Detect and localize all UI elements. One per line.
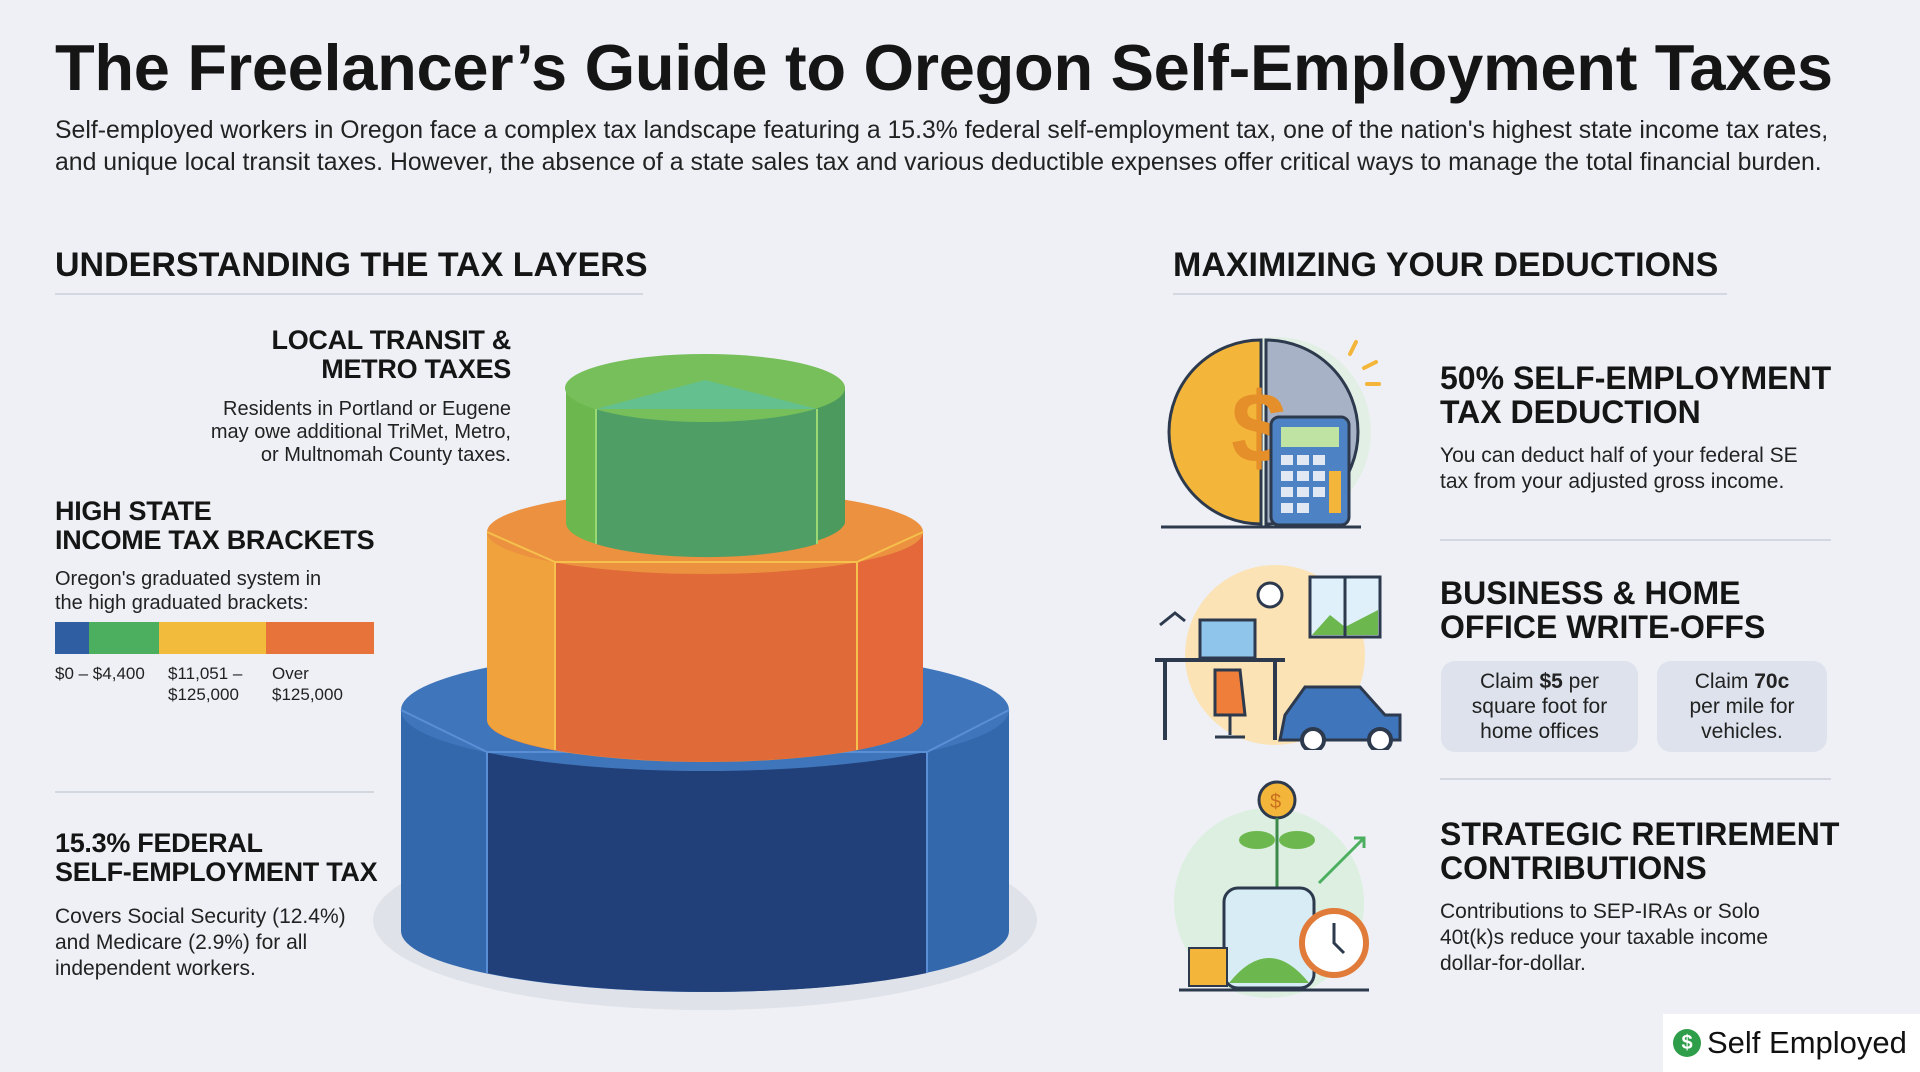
text: business & home office — [1440, 575, 1765, 645]
bracket color bar — [55, 622, 374, 654]
text: retirement contributions: Contributions to SEP-IRAs or Solo — [1440, 900, 1760, 923]
text: federal SE tax: independent workers. — [55, 957, 256, 980]
text: high state income tax: HIGH STATE — [55, 496, 212, 526]
top tier: local — [565, 354, 845, 557]
logo: Self Employed — [1663, 1014, 1920, 1072]
text: retirement contributions: STRATEGIC RETIREMENT — [1440, 816, 1839, 852]
text: 50% deduction: You can deduct half of your federal SE — [1440, 444, 1798, 467]
title: The Freelancer’s Guide to Oregon Self-Employment Taxes — [55, 31, 1833, 104]
text: federal SE tax: Covers Social Security (12.4%) — [55, 905, 346, 928]
subtitle: and unique local transit taxes. However, the absence of a state sales tax and various deductible expenses offer critical ways to manage the total financial burden. — [55, 149, 1822, 176]
box: mileage rate: per mile for — [1689, 695, 1795, 718]
text: 50% deduction: tax from your adjusted gross income. — [1440, 470, 1784, 493]
text: business & home office: OFFICE WRITE-OFFS — [1440, 609, 1765, 645]
text: local transit: Residents in Portland or Eugene — [223, 398, 511, 420]
text: 50% deduction: TAX DEDUCTION — [1440, 394, 1701, 430]
heading: understanding the tax layers: UNDERSTANDING THE TAX LAYERS — [55, 246, 648, 284]
icon: retirement jar — [1174, 780, 1369, 998]
icon: home office and car — [1155, 565, 1402, 750]
logo: Self Employed: Self Employed — [1707, 1025, 1907, 1060]
shadow — [373, 830, 1037, 1010]
text: federal SE tax: SELF-EMPLOYMENT TAX — [55, 857, 377, 887]
chart: layered tax cake — [373, 354, 1037, 1010]
text: $11,051 – — [168, 664, 242, 683]
box: home office rate: home offices — [1480, 720, 1599, 743]
bracket labels: $0 – $4,400 — [55, 664, 145, 683]
text: retirement contributions — [1440, 816, 1840, 975]
box: mileage rate: Claim 70c — [1695, 670, 1789, 693]
text: federal SE tax — [55, 828, 378, 980]
text: $125,000 — [168, 685, 239, 704]
icon: coin and calculator: $ — [1231, 372, 1287, 484]
text: retirement contributions: CONTRIBUTIONS — [1440, 850, 1707, 886]
text: high state income tax: INCOME TAX BRACKETS — [55, 525, 374, 555]
subtitle: Self-employed workers in Oregon face a complex tax landscape featuring a 15.3% federal self-employment tax, one of the nation's highest state income tax rates, — [55, 117, 1828, 144]
text: local transit: or Multnomah County taxes. — [261, 444, 511, 466]
text: retirement contributions: dollar-for-dollar. — [1440, 952, 1586, 975]
text: local transit: may owe additional TriMet, Metro, — [211, 421, 511, 443]
text: high state income tax: Oregon's graduated system in — [55, 568, 321, 590]
text: local transit: LOCAL TRANSIT & — [272, 325, 511, 355]
text: $125,000 — [272, 685, 343, 704]
bottom tier: federal — [401, 649, 1009, 992]
text: high state income tax: the high graduated brackets: — [55, 592, 309, 614]
text: federal SE tax: and Medicare (2.9%) for all — [55, 931, 307, 954]
text: federal SE tax: 15.3% FEDERAL — [55, 828, 263, 858]
text: retirement contributions: 40t(k)s reduce your taxable income — [1440, 926, 1768, 949]
text: 50% deduction — [1440, 360, 1831, 493]
subtitle — [55, 117, 1828, 176]
logo: Self Employed: $ — [1681, 1032, 1693, 1054]
text: local transit — [211, 325, 511, 466]
box: home office rate — [1441, 661, 1638, 752]
heading: maximizing deductions: MAXIMIZING YOUR DEDUCTIONS — [1173, 246, 1718, 284]
text: high state income tax — [55, 496, 374, 614]
box: home office rate: square foot for — [1472, 695, 1607, 718]
icon: coin and calculator — [1161, 337, 1381, 528]
text: business & home office: BUSINESS & HOME — [1440, 575, 1740, 611]
middle tier: state — [487, 490, 923, 762]
icon: retirement jar: $ — [1270, 791, 1281, 813]
text: local transit: METRO TAXES — [321, 354, 511, 384]
box: home office rate: Claim $5 per — [1480, 670, 1599, 693]
text: 50% deduction: 50% SELF-EMPLOYMENT — [1440, 360, 1831, 396]
box: mileage rate: vehicles. — [1701, 720, 1783, 743]
box: mileage rate — [1657, 661, 1827, 752]
text: Over — [272, 664, 309, 683]
